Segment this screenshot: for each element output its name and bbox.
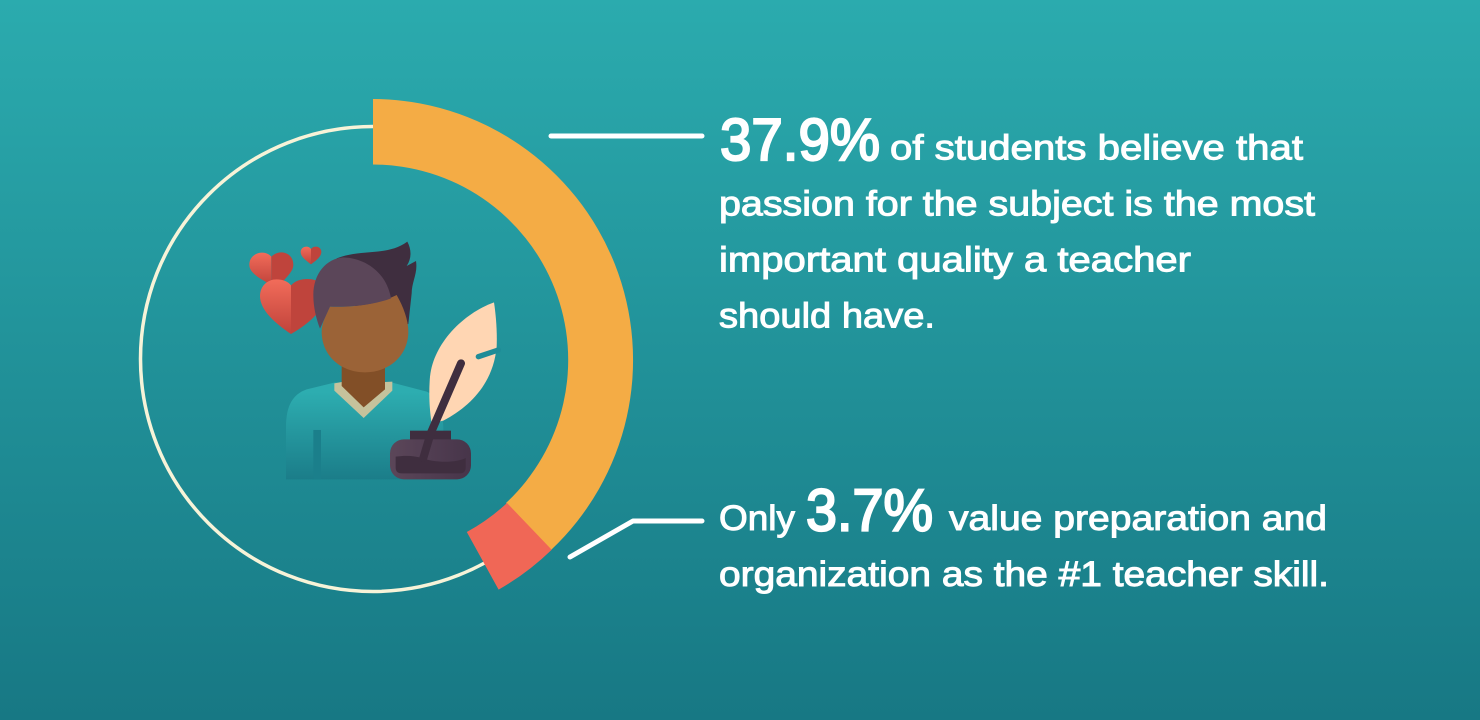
leader line: 3.7% xyxy=(570,521,702,557)
word: Only: Only xyxy=(719,499,796,538)
shirt crease xyxy=(313,430,321,479)
donut chart xyxy=(140,99,633,592)
neck xyxy=(342,363,385,407)
callout: 3.7% preparation xyxy=(719,478,1329,594)
quill xyxy=(423,363,461,458)
orange segment: 37.9% xyxy=(373,99,633,550)
line 4: should have. xyxy=(719,296,935,336)
shirt xyxy=(286,383,443,479)
callout: 37.9% passion xyxy=(719,107,1315,336)
line 1: of students believe that xyxy=(890,128,1303,168)
back hair xyxy=(337,242,416,330)
ink bottle xyxy=(390,431,471,479)
face xyxy=(322,295,408,372)
stat: 3.7%: 3.7% xyxy=(806,478,933,544)
line 3: important quality a teacher xyxy=(719,240,1191,280)
line 2: organization as the #1 teacher skill. xyxy=(719,555,1329,594)
red segment: 3.7% xyxy=(467,503,552,590)
icon: teacher with hearts, feather quill and ink xyxy=(249,242,498,479)
icon: hearts xyxy=(249,247,321,334)
collar xyxy=(334,382,392,418)
front hair xyxy=(313,257,391,329)
line 1: value preparation and xyxy=(949,499,1327,538)
leader line: 37.9% xyxy=(551,134,702,138)
feather xyxy=(429,302,497,423)
feather notch xyxy=(478,350,498,357)
thin ring: remaining share xyxy=(140,126,606,592)
line 2: passion for the subject is the most xyxy=(719,184,1315,224)
stat: 37.9%: 37.9% xyxy=(720,107,880,173)
